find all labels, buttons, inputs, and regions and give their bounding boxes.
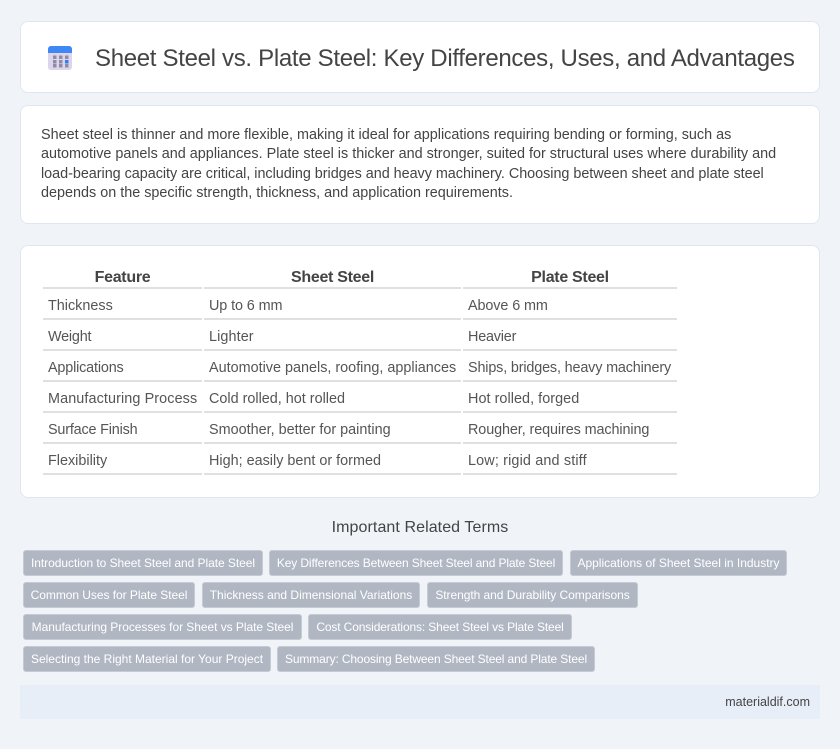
panel: introduction: Sheet steel is thinner and more flexible, making it ideal for applications requiring bending or forming, such as: [41, 127, 731, 143]
tag: Summary: Choosing Between Sheet Steel and Plate Steel: [285, 652, 587, 666]
tag: [23, 646, 271, 672]
panel: introduction: automotive panels and appliances. Plate steel is thicker and stronger, suited for structural uses where durability and: [41, 146, 776, 162]
tag: [23, 614, 302, 640]
row: surface finish: Surface Finish: [48, 422, 137, 438]
tag: Strength and Durability Comparisons: [435, 588, 630, 602]
row: applications: Ships, bridges, heavy machinery: [468, 360, 671, 376]
tag: [570, 550, 787, 576]
row: surface finish: Rougher, requires machining: [468, 422, 649, 438]
row: flexibility: Low; rigid and stiff: [468, 453, 587, 469]
tag list: [23, 550, 787, 672]
row: flexibility: [43, 453, 677, 475]
row: manufacturing process: [43, 391, 677, 413]
row: manufacturing process: Cold rolled, hot rolled: [209, 391, 345, 407]
icon: calendar grid: [48, 46, 72, 70]
row: surface finish: [43, 422, 677, 444]
panel: comparison table: [20, 245, 820, 498]
tag: Selecting the Right Material for Your Project: [31, 652, 263, 666]
row: thickness: Above 6 mm: [468, 298, 548, 314]
heading: related terms: Important Related Terms: [332, 519, 508, 536]
tag: Cost Considerations: Sheet Steel vs Plate Steel: [316, 620, 564, 634]
tag: [23, 582, 195, 608]
table header: Sheet Steel: [291, 269, 374, 286]
table header: Feature: [95, 269, 150, 286]
row: applications: Automotive panels, roofing, appliances: [209, 360, 456, 376]
tag: Introduction to Sheet Steel and Plate Steel: [31, 556, 255, 570]
tag: Applications of Sheet Steel in Industry: [577, 556, 780, 570]
row: flexibility: Flexibility: [48, 453, 107, 469]
footer bar: [20, 685, 820, 719]
row: applications: Applications: [48, 360, 124, 376]
row: weight: Weight: [48, 329, 91, 345]
tag: Common Uses for Plate Steel: [31, 588, 187, 602]
tag: [427, 582, 638, 608]
tag: [202, 582, 420, 608]
row: weight: Heavier: [468, 329, 516, 345]
row: flexibility: High; easily bent or formed: [209, 453, 381, 469]
footer source: materialdif.com: [725, 695, 810, 709]
row: thickness: [43, 298, 677, 320]
panel: header: [20, 21, 820, 93]
row: manufacturing process: Hot rolled, forged: [468, 391, 579, 407]
row: thickness: Thickness: [48, 298, 113, 314]
panel: introduction: load-bearing capacity are critical, including bridges and heavy machinery. Choosing between sheet and plate steel: [41, 166, 764, 182]
table header: [43, 269, 677, 289]
tag: [23, 550, 263, 576]
panel: introduction: depends on the specific strength, thickness, and application requirements.: [41, 185, 513, 201]
tag: [269, 550, 563, 576]
tag: Key Differences Between Sheet Steel and Plate Steel: [277, 556, 555, 570]
tag: [277, 646, 595, 672]
row: weight: Lighter: [209, 329, 254, 345]
tag: [308, 614, 572, 640]
row: thickness: Up to 6 mm: [209, 298, 282, 314]
tag: Manufacturing Processes for Sheet vs Plate Steel: [32, 620, 293, 634]
title: Sheet Steel vs. Plate Steel: Key Differences, Uses, and Advantages: [95, 45, 795, 72]
row: applications: [43, 360, 677, 382]
tag: Thickness and Dimensional Variations: [210, 588, 412, 602]
row: surface finish: Smoother, better for painting: [209, 422, 391, 438]
row: manufacturing process: Manufacturing Process: [48, 391, 197, 407]
row: weight: [43, 329, 677, 351]
panel: introduction: [20, 105, 820, 224]
table header: Plate Steel: [531, 269, 609, 286]
